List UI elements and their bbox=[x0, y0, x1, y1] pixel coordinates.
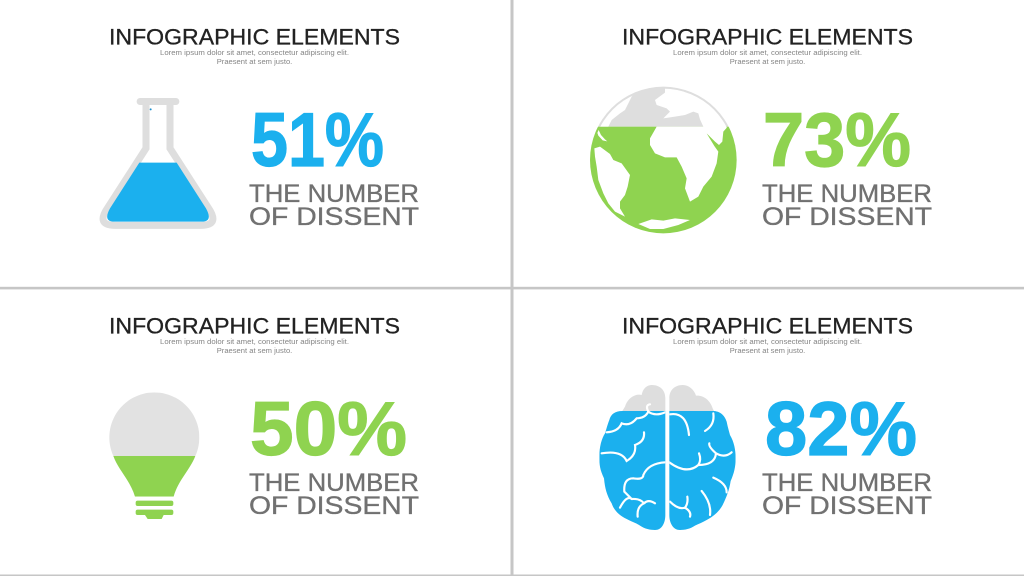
subtitle text: Praesent at sem justo. bbox=[217, 57, 292, 66]
icon: flask bbox=[103, 98, 213, 225]
panel: brain 82% bbox=[597, 314, 932, 534]
divider: horizontal bbox=[0, 287, 1024, 289]
caption: THE NUMBER bbox=[762, 180, 932, 208]
panel: globe 73% bbox=[588, 24, 932, 235]
panel: flask 51% bbox=[103, 24, 419, 231]
caption bbox=[762, 180, 932, 231]
caption bbox=[249, 180, 419, 231]
caption: THE NUMBER bbox=[762, 469, 932, 497]
caption: THE NUMBER bbox=[249, 180, 419, 208]
percentage: 82% bbox=[765, 387, 917, 472]
subtitle text: Lorem ipsum dolor sit amet, consectetur adipiscing elit. bbox=[160, 337, 349, 346]
caption: OF DISSENT bbox=[762, 492, 932, 520]
subtitle text: Praesent at sem justo. bbox=[730, 57, 805, 66]
panel: light bulb 50% bbox=[105, 314, 419, 520]
percentage: 51% bbox=[251, 98, 384, 183]
subtitle text: Praesent at sem justo. bbox=[730, 346, 805, 355]
divider: bottom edge bbox=[0, 574, 1024, 576]
percentage: 50% bbox=[250, 387, 407, 472]
subtitle text: Lorem ipsum dolor sit amet, consectetur adipiscing elit. bbox=[673, 48, 862, 57]
caption: OF DISSENT bbox=[249, 203, 419, 231]
divider: vertical bbox=[510, 0, 514, 576]
heading: INFOGRAPHIC ELEMENTS bbox=[622, 314, 913, 338]
heading: INFOGRAPHIC ELEMENTS bbox=[622, 24, 913, 50]
subtitle text bbox=[160, 48, 349, 66]
icon: light bulb bbox=[109, 392, 200, 519]
heading: INFOGRAPHIC ELEMENTS bbox=[109, 314, 400, 338]
icon: brain bbox=[597, 382, 740, 534]
subtitle text bbox=[673, 337, 862, 355]
subtitle text bbox=[673, 48, 862, 66]
icon: globe bbox=[588, 83, 738, 235]
subtitle text: Lorem ipsum dolor sit amet, consectetur adipiscing elit. bbox=[160, 48, 349, 57]
subtitle text: Lorem ipsum dolor sit amet, consectetur adipiscing elit. bbox=[673, 337, 862, 346]
subtitle text: Praesent at sem justo. bbox=[217, 346, 292, 355]
caption bbox=[762, 469, 932, 520]
percentage: 73% bbox=[763, 98, 911, 183]
caption: OF DISSENT bbox=[762, 203, 932, 231]
caption bbox=[249, 469, 419, 520]
caption: OF DISSENT bbox=[249, 492, 419, 520]
subtitle text bbox=[160, 337, 349, 355]
caption: THE NUMBER bbox=[249, 469, 419, 497]
heading: INFOGRAPHIC ELEMENTS bbox=[109, 24, 400, 50]
